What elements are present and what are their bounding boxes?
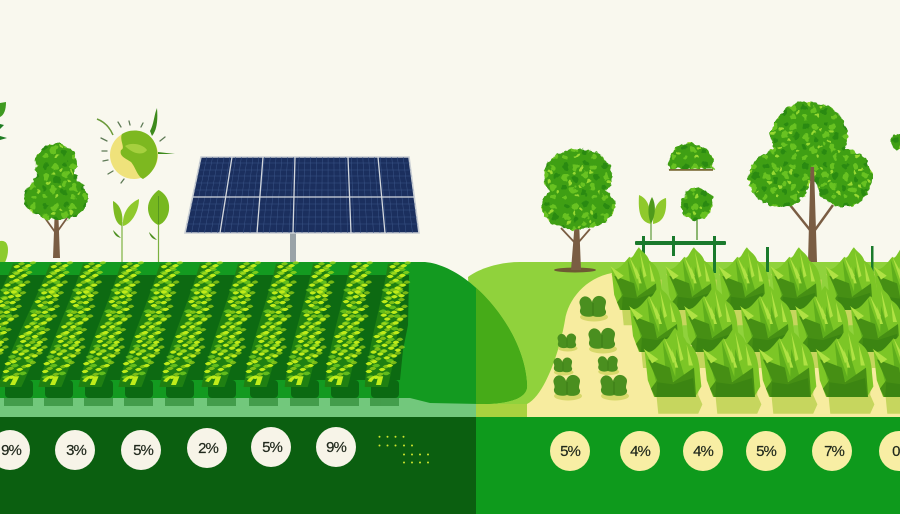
sun globe icon [97,108,175,183]
badge 5% [121,430,161,470]
bush [668,143,714,171]
badge 4% [620,431,660,471]
pale band [0,398,476,417]
badge 5%: 5% [560,443,580,460]
badge 5% [251,427,291,467]
dark field under rows [0,275,409,380]
panel frame and cells [180,157,425,233]
right tree [541,149,615,272]
badge 3%: 3% [66,442,86,459]
badge 0% clipped [879,431,900,471]
hill overlap [476,288,527,404]
band overlap [476,404,527,417]
badge 4%: 4% [693,443,713,460]
badge 5%: 5% [262,439,282,456]
badge 5% [746,431,786,471]
small leafy sprout [639,195,666,240]
right bottom panel [476,417,900,514]
left edge leaves [0,102,8,271]
badge 2% [187,428,227,468]
panel pole [290,233,296,263]
sprout with two leaves [113,199,139,262]
left percentage badges [0,427,356,470]
right edge tree fragment [891,133,900,149]
badge 9% [0,430,30,470]
right percentage badges [550,431,900,471]
badge 3% [55,430,95,470]
crop row shadows [4,380,399,406]
badge 4% [683,431,723,471]
round tree [681,188,713,240]
decorative dots [378,436,429,464]
badge 7% [812,431,852,471]
yellow soil path [526,273,900,417]
badge 7%: 7% [824,443,844,460]
large tree [749,102,872,262]
right crop rows [610,247,900,414]
badge 9% [316,427,356,467]
left crop rows [0,261,417,387]
solar panel [180,157,425,263]
badge 9%: 9% [326,439,346,456]
left tree [24,143,88,258]
right ground hill [468,262,900,417]
badge 5% [550,431,590,471]
lettuce plants [553,296,629,400]
badge 5%: 5% [756,443,776,460]
left bottom panel [0,417,476,514]
fence [635,236,874,273]
left ground hill [0,262,527,417]
badge 2%: 2% [198,440,218,457]
badge 9%: 9% [1,442,21,459]
hill shape [0,262,527,404]
badge 5%: 5% [133,442,153,459]
badge 4%: 4% [630,443,650,460]
sprout with oval leaf [148,190,169,262]
